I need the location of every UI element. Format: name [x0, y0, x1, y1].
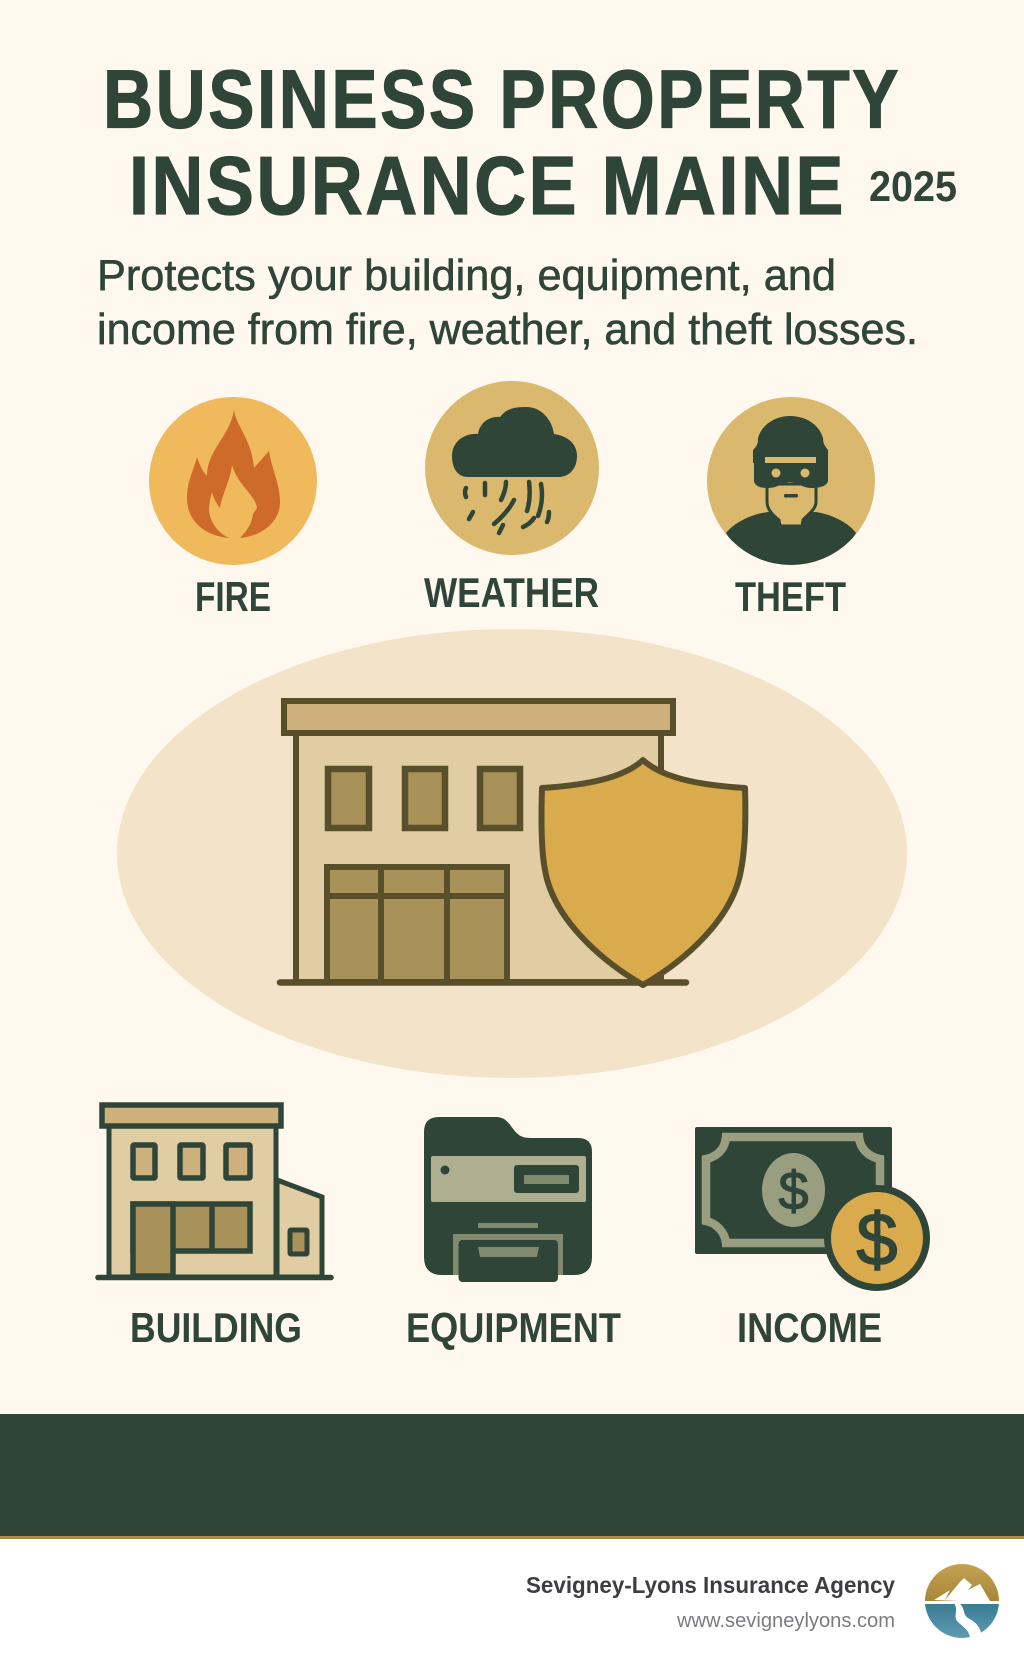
- icon: income: $: [778, 1162, 809, 1222]
- subtitle: income from fire, weather, and theft losses.: [97, 305, 918, 354]
- title: INSURANCE MAINE: [129, 139, 846, 232]
- central building illustration: [280, 701, 686, 982]
- icon: income: $: [856, 1198, 898, 1281]
- label: theft: THEFT: [735, 573, 846, 620]
- label: weather: WEATHER: [424, 569, 599, 616]
- subtitle: Protects your building, equipment, and: [97, 251, 836, 300]
- icon: building: [98, 1105, 331, 1278]
- gold rule: [0, 1536, 1024, 1539]
- logo: [925, 1564, 999, 1640]
- title: [103, 52, 901, 232]
- footer url: www.sevigneylyons.com: [676, 1609, 895, 1632]
- icon: weather: [425, 381, 599, 555]
- shield: [541, 760, 745, 985]
- icon: theft: [707, 397, 875, 575]
- year label: 2025: [869, 163, 957, 211]
- dark band: [0, 1414, 1024, 1536]
- icon: income: [695, 1127, 926, 1288]
- footer agency name: Sevigney-Lyons Insurance Agency: [526, 1572, 895, 1598]
- label: fire: FIRE: [195, 573, 271, 620]
- icon: fire: [149, 397, 317, 565]
- icon: equipment: [424, 1117, 592, 1282]
- central ellipse: [117, 629, 907, 1078]
- footer panel: [0, 1539, 1024, 1666]
- label: building: BUILDING: [130, 1304, 302, 1351]
- label: income: INCOME: [737, 1304, 882, 1351]
- subtitle: [97, 251, 918, 354]
- label: equipment: EQUIPMENT: [406, 1304, 621, 1351]
